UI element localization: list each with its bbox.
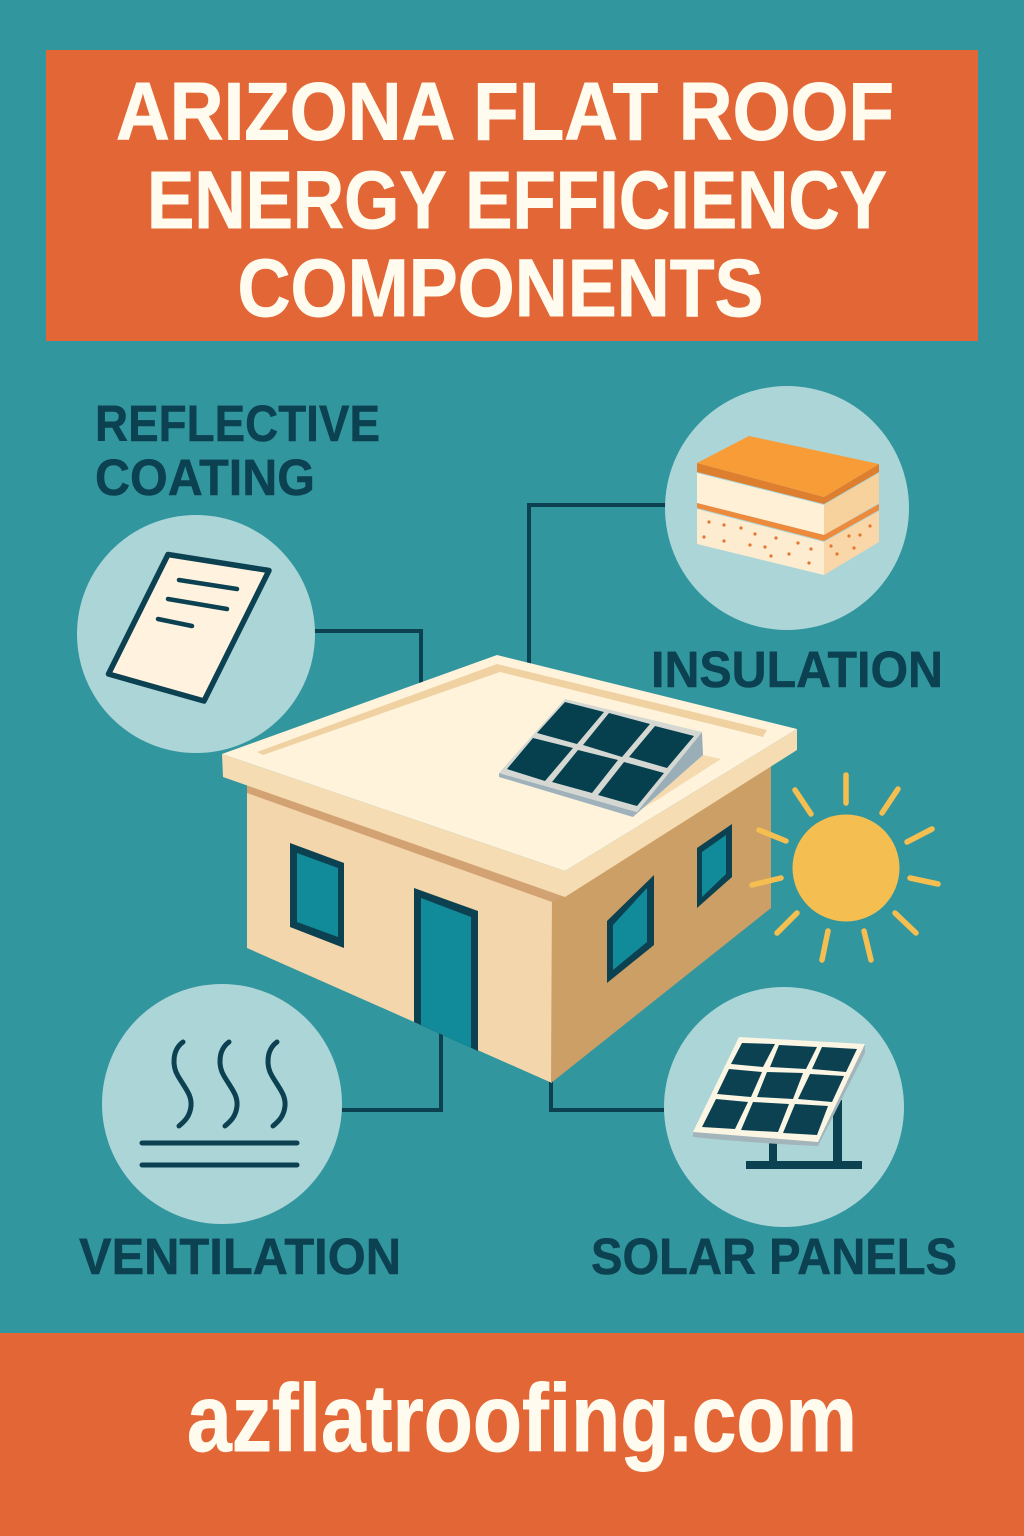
- building: roof top: [222, 655, 797, 871]
- building: left window: [290, 843, 344, 948]
- icon: solar panel: [664, 987, 904, 1227]
- icon: reflective coating sheet: [77, 515, 315, 753]
- building: door: [414, 888, 478, 1051]
- footer banner: azflatroofing.com: [187, 1365, 857, 1472]
- title banner: COMPONENTS: [238, 243, 764, 334]
- title banner: [46, 50, 978, 341]
- label: reflective coating: COATING: [95, 449, 315, 506]
- building: side wall: [551, 760, 771, 1083]
- icon: ventilation: [102, 984, 342, 1224]
- title banner: ARIZONA FLAT ROOF: [116, 66, 894, 158]
- icon: sun: [752, 775, 938, 960]
- building: side window near: [607, 875, 654, 983]
- title banner: ENERGY EFFICIENCY: [147, 155, 887, 246]
- label: ventilation: VENTILATION: [79, 1228, 401, 1285]
- building: solar array on roof: [499, 699, 721, 817]
- label: insulation: INSULATION: [651, 641, 943, 698]
- label: reflective coating: REFLECTIVE: [95, 395, 380, 452]
- building: front wall: [247, 780, 552, 1083]
- label: reflective coating: [95, 395, 380, 506]
- connector lines: [314, 505, 666, 1110]
- footer banner: [0, 1333, 1024, 1536]
- building: side window far: [697, 824, 732, 908]
- icon: insulation layers: [665, 386, 909, 630]
- building: [222, 655, 797, 1083]
- building: roof parapet band: [257, 664, 767, 755]
- label: solar panels: SOLAR PANELS: [591, 1228, 957, 1285]
- building: roof edge: [222, 729, 797, 897]
- building: roof shadow: [247, 783, 565, 902]
